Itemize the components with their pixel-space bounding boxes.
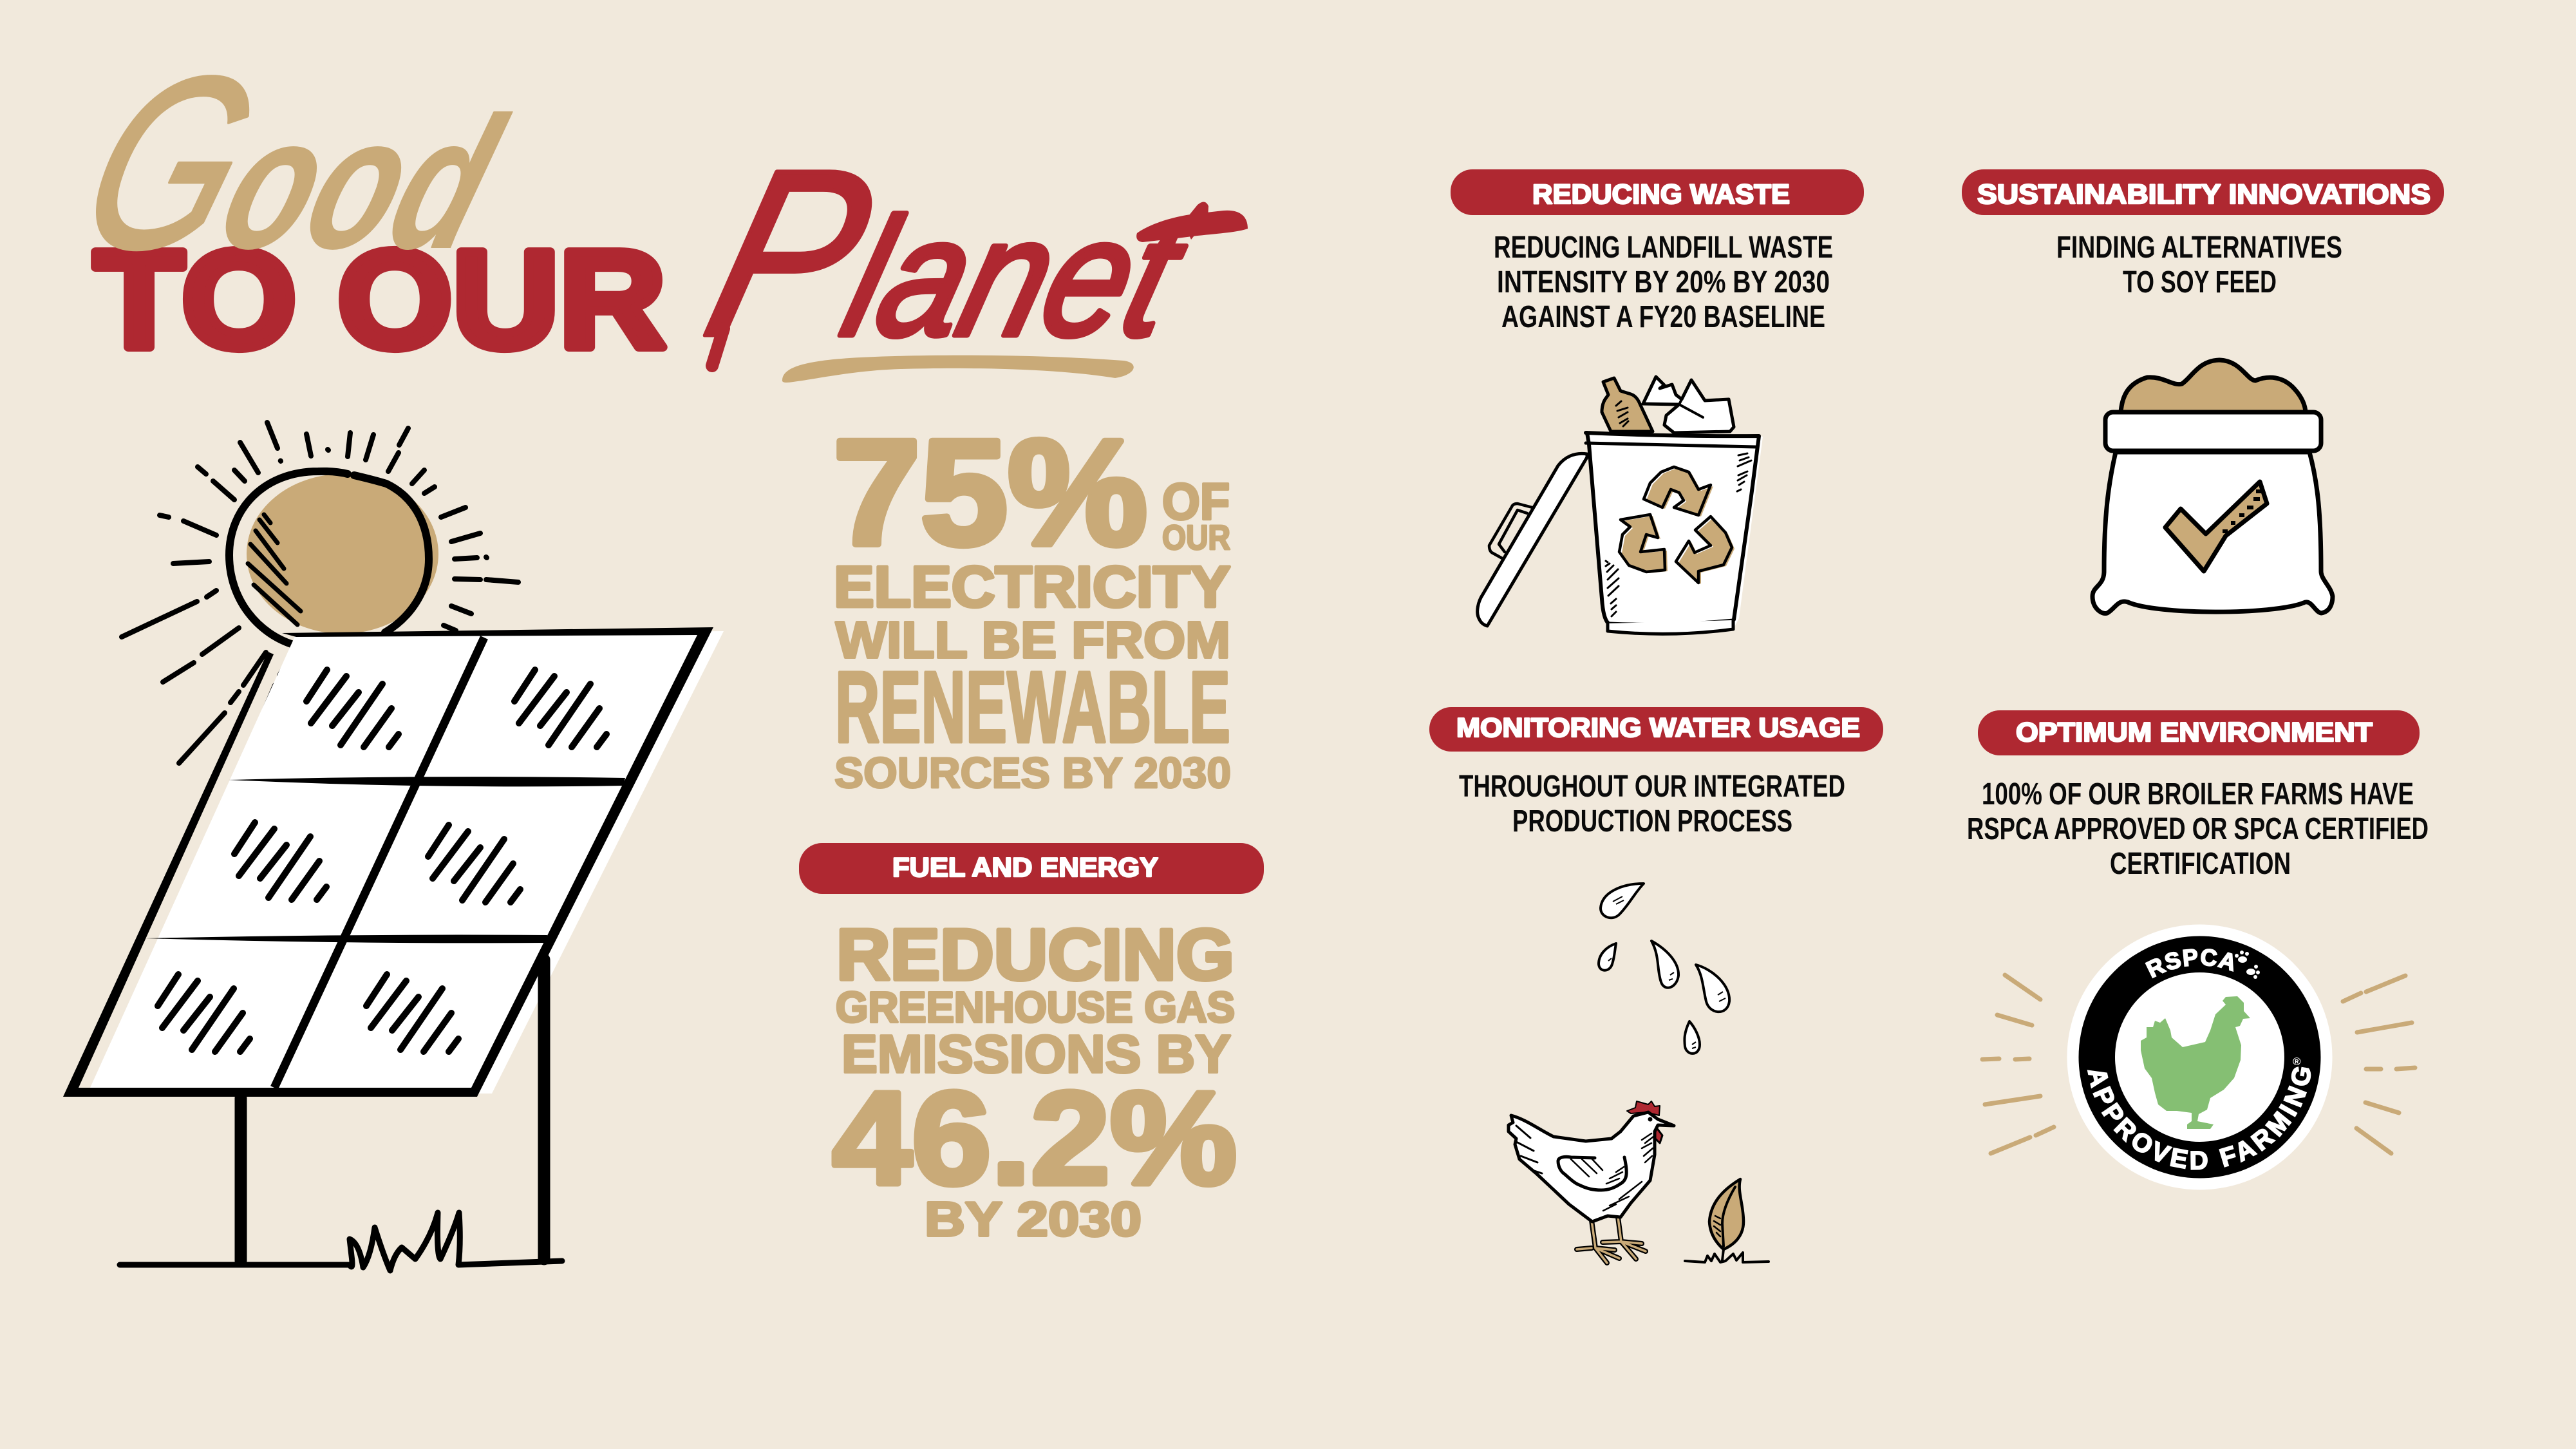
panel: reducing waste (1451, 169, 1864, 634)
pill heading: sustainability innovations (1962, 169, 2444, 215)
text block: 75% of our electricity: ELECTRICITY (834, 555, 1230, 620)
pill heading: monitoring water usage (1429, 707, 1883, 752)
crumpled paper (1643, 377, 1734, 433)
body (1509, 1112, 1674, 1222)
text block: broiler farms: CERTIFICATION (2110, 847, 2291, 881)
panel: monitoring water usage (1429, 707, 1883, 1263)
heading script: Good: Good (55, 26, 542, 299)
icon: chicken (1509, 1101, 1674, 1263)
text block: landfill waste: INTENSITY BY 20% BY 2030 (1497, 265, 1830, 299)
title: Good to our Planet (55, 26, 1248, 385)
badge: RSPCA approved farming: ® (2293, 1056, 2301, 1068)
badge: RSPCA approved farming: RSPCA (2145, 949, 2234, 979)
wing (1558, 1157, 1626, 1190)
badge sparkle rays (1982, 975, 2415, 1153)
text block: soy feed: FINDING ALTERNATIVES (2056, 231, 2342, 265)
text block: soy feed: TO SOY FEED (2123, 265, 2277, 299)
pill heading: reducing waste: REDUCING WASTE (1532, 179, 1790, 210)
text block: soy feed (2056, 231, 2342, 299)
underline stroke (782, 355, 1134, 383)
recycle arrows (1622, 468, 1735, 584)
comb and wattle (1627, 1101, 1660, 1115)
text block: reducing greenhouse gas: BY 2030 (925, 1192, 1142, 1246)
icon: recycling bin (1478, 377, 1763, 634)
icon: sun (229, 471, 438, 645)
badge: RSPCA approved farming: APPROVED FARMING (2087, 1066, 2311, 1170)
text block: integrated production (1459, 770, 1845, 838)
panel stand and grass (120, 960, 562, 1271)
text block: 75% of our electricity: RENEWABLE (835, 651, 1230, 764)
panel: optimum environment (1967, 710, 2429, 1190)
solar panel (63, 627, 724, 1097)
text block: integrated production: THROUGHOUT OUR INTEGRATED (1459, 770, 1845, 804)
icon: water drops (1599, 884, 1729, 1054)
pill heading: fuel and energy: FUEL AND ENERGY (892, 852, 1158, 882)
text block: 75% of our electricity: SOURCES BY 2030 (834, 749, 1231, 797)
pill heading: reducing waste (1451, 169, 1864, 215)
text block: landfill waste: AGAINST A FY20 BASELINE (1501, 300, 1825, 334)
icon: feed sack with check (2092, 360, 2333, 614)
text block: reducing greenhouse gas: GREENHOUSE GAS (836, 983, 1235, 1032)
panel: sustainability innovations (1962, 169, 2444, 614)
bin body (1586, 433, 1763, 634)
text block: reducing greenhouse gas: REDUCING (836, 914, 1234, 995)
pill heading: monitoring water usage: MONITORING WATER USAGE (1456, 712, 1860, 743)
text block: broiler farms (1967, 777, 2429, 881)
text block: landfill waste: REDUCING LANDFILL WASTE (1494, 231, 1833, 265)
bin lid (1478, 453, 1587, 626)
badge: RSPCA approved farming (2067, 925, 2332, 1190)
icon: green hen silhouette (2141, 996, 2250, 1129)
illustration: sun and solar panel (63, 422, 724, 1271)
text block: 75% of our electricity: OF (1162, 473, 1230, 530)
text block: 75% of our electricity: OUR (1162, 518, 1230, 557)
pill heading: optimum environment (1978, 710, 2420, 755)
text block: landfill waste (1494, 231, 1833, 334)
heading script: Planet: Planet (685, 120, 1220, 385)
bottle (1602, 378, 1653, 431)
pill heading: optimum environment: OPTIMUM ENVIRONMENT (2016, 717, 2373, 747)
pill heading: fuel and energy (799, 843, 1264, 894)
icon: leaf sprout (1685, 1179, 1769, 1262)
text block: 75% of our electricity: 75% (833, 409, 1147, 576)
text block: broiler farms: RSPCA APPROVED OR SPCA CERTIFIED (1967, 812, 2429, 846)
text block: reducing greenhouse gas: EMISSIONS BY (841, 1024, 1231, 1084)
icon: sun rays (122, 422, 518, 763)
heading: TO OUR: TO OUR (94, 222, 666, 377)
chicken legs (1577, 1217, 1646, 1263)
text block: 75% of our electricity: WILL BE FROM (836, 611, 1230, 668)
pill heading: sustainability innovations: SUSTAINABILITY INNOVATIONS (1977, 179, 2430, 210)
text block: reducing greenhouse gas (832, 914, 1237, 1246)
text block: 75% of our electricity (833, 409, 1231, 797)
text block: integrated production: PRODUCTION PROCESS (1512, 804, 1792, 838)
text block: broiler farms: 100% OF OUR BROILER FARMS HAVE (1982, 777, 2414, 811)
text block: reducing greenhouse gas: 46.2% (832, 1065, 1237, 1212)
